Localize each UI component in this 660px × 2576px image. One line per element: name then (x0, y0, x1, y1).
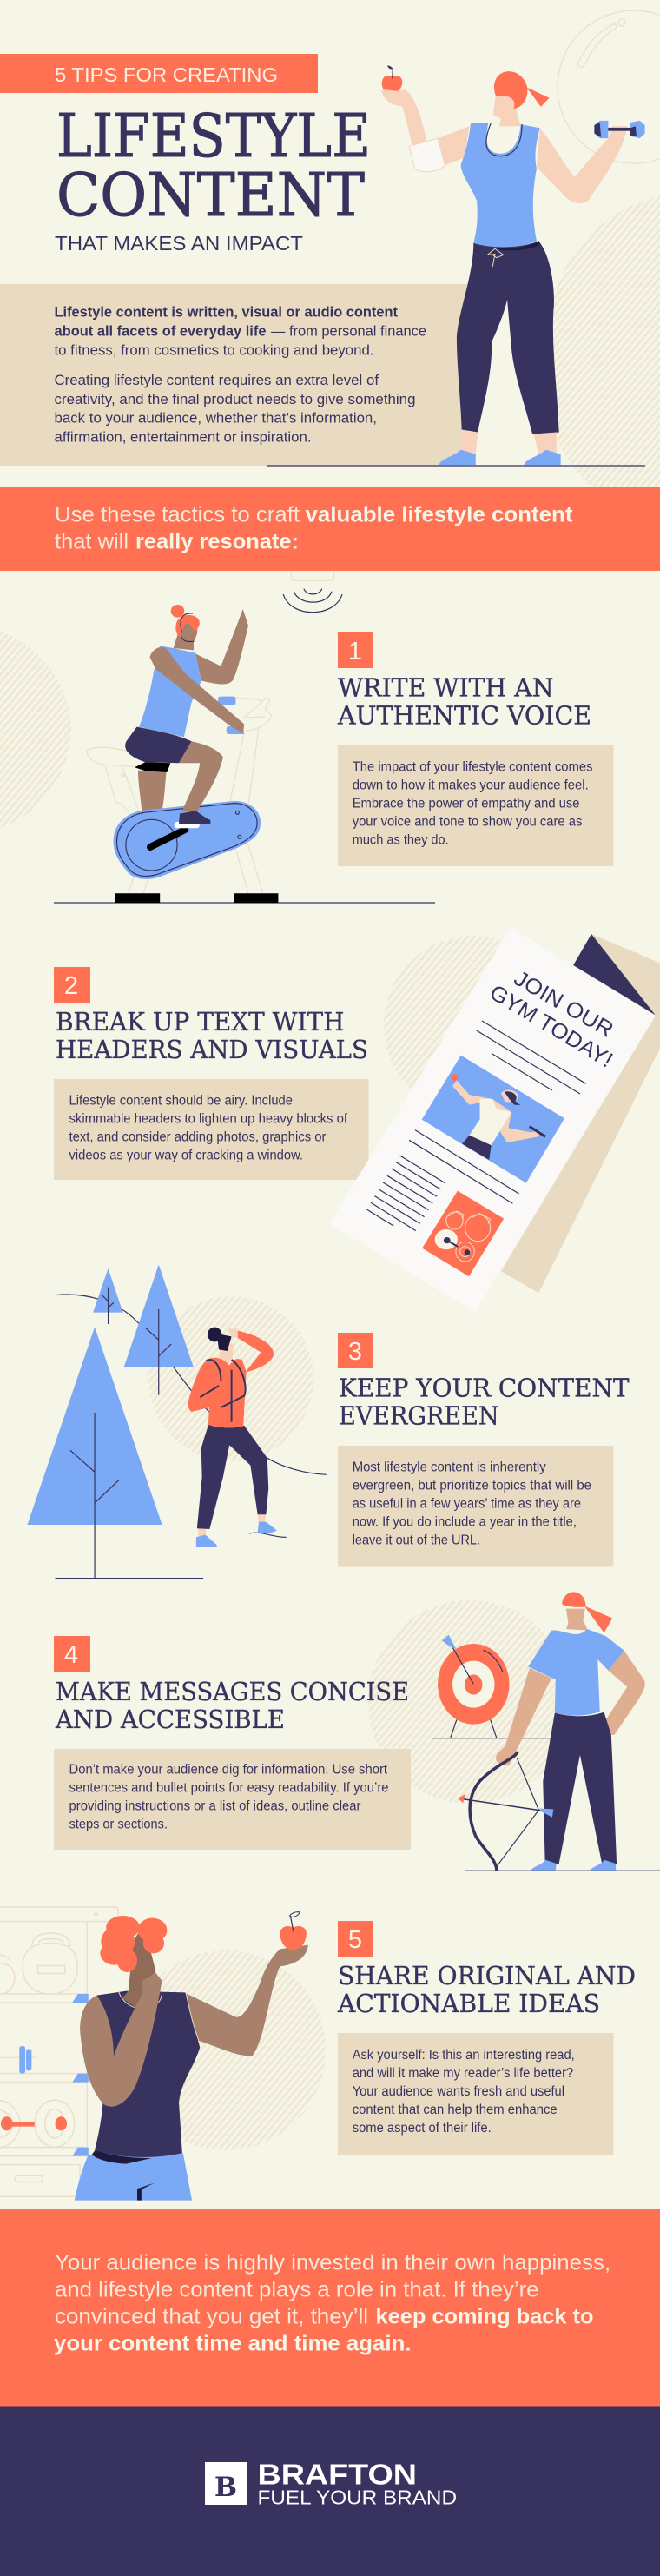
sweater (188, 1331, 274, 1427)
pants (543, 1712, 617, 1864)
raised arm (195, 609, 248, 684)
intro text: Creating lifestyle content requires an extra level of (54, 372, 379, 388)
small dumbbell (19, 2046, 31, 2074)
closing banner (0, 2209, 660, 2407)
small tree (93, 1268, 123, 1324)
illustration: thinking woman with apple (0, 1907, 308, 2201)
tactics banner: that will (55, 530, 129, 554)
tip 1 number: 1 (348, 638, 362, 666)
dumbbell disc (435, 1229, 470, 1255)
intro text: Lifestyle content is written, visual or audio content (54, 304, 398, 320)
shelf brackets (72, 1994, 89, 2156)
intro text: creativity, and the final product needs to give something (54, 391, 415, 407)
tip 3 text box: Most lifestyle content is inherently (353, 1460, 546, 1474)
tip 3 number: 3 (348, 1338, 362, 1366)
stand feet (115, 893, 278, 903)
shoe (179, 811, 210, 824)
hiker ankles and shoes (196, 1514, 287, 1547)
neck and face (174, 619, 198, 650)
ceiling speaker (283, 572, 342, 613)
tip 4 text box: providing instructions or a list of ideas, outline clear (69, 1799, 361, 1814)
neck and face (493, 93, 521, 126)
big tree (28, 1327, 162, 1579)
tip 1 heading: AUTHENTIC VOICE (337, 700, 591, 730)
striped circle: header (542, 195, 660, 487)
tip 4 heading (55, 1677, 409, 1734)
striped circle: tip 3 (148, 1296, 314, 1461)
tip 1 text box: down to how it makes your audience feel. (353, 778, 589, 792)
intro tan panel (0, 284, 467, 466)
tactics banner: Use these tactics to craft (55, 502, 300, 526)
target (432, 1635, 551, 1738)
right arm (185, 1945, 308, 2056)
brafton logo: BRAFTON (257, 2459, 417, 2490)
paper back (501, 934, 660, 1293)
tip 4 text box: sentences and bullet points for easy readability. If you’re (69, 1781, 389, 1796)
tip 3 heading: EVERGREEN (339, 1401, 498, 1430)
hair (171, 605, 200, 637)
brafton logo (205, 2459, 457, 2509)
ground line: tip 1 (54, 902, 435, 904)
pants (457, 242, 559, 434)
blue photo (422, 1056, 564, 1183)
tip 3 text box: now. If you do include a year in the title, (353, 1514, 577, 1529)
tip 5 text box (338, 2033, 613, 2155)
hair and ponytail (562, 1592, 612, 1632)
tank top (139, 646, 201, 737)
illustration: woman with apple and dumbbell (381, 66, 645, 465)
decorative bubble outline (558, 10, 660, 163)
illustration: archer and target (432, 1592, 660, 1871)
brafton logo: FUEL YOUR BRAND (257, 2487, 457, 2509)
tip 2 text box: text, and consider adding photos, graphics or (69, 1130, 327, 1145)
bow and arrow (458, 1752, 553, 1871)
closing banner: your content time and time again. (54, 2332, 412, 2356)
headset (181, 613, 194, 642)
tip 5 heading (337, 1961, 636, 2018)
ankles (462, 430, 557, 455)
tip 2 heading: HEADERS AND VISUALS (56, 1035, 368, 1064)
tip 4 number (54, 1636, 90, 1672)
backpack straps (200, 1360, 246, 1422)
tip 1 text box: Embrace the power of empathy and use (353, 796, 580, 811)
tip 5 text box: Ask yourself: Is this an interesting read, (353, 2048, 575, 2063)
tip 2 text box (54, 1079, 368, 1180)
forearm to chin (80, 1973, 162, 2107)
tip 3 number (338, 1333, 373, 1368)
title (56, 103, 371, 230)
orange photo (422, 1191, 504, 1276)
tip 5 number: 5 (348, 1926, 362, 1954)
title: LIFESTYLE (56, 103, 371, 171)
tip 1 heading: WRITE WITH AN (338, 672, 554, 702)
tip 1 number (338, 632, 373, 668)
tip 5 heading: SHARE ORIGINAL AND (338, 1961, 636, 1990)
tip 1 heading (337, 672, 591, 730)
gym shelves outline (0, 1907, 118, 2196)
tip 4 heading: MAKE MESSAGES CONCISE (56, 1677, 409, 1706)
text lines (367, 1021, 586, 1231)
tip 5 number (338, 1921, 373, 1957)
tip 2 number (54, 967, 90, 1003)
left arm (381, 89, 469, 167)
tip 1 text box: your voice and tone to show you care as (353, 814, 583, 829)
tree ground (55, 1578, 203, 1579)
shoes (439, 450, 561, 465)
closing banner: Your audience is highly invested in their own happiness, (55, 2250, 610, 2275)
trail curve (55, 1295, 327, 1474)
ground line: header (267, 465, 645, 467)
tip 3 text box (338, 1446, 613, 1567)
title: CONTENT (56, 162, 365, 230)
kettlebells (446, 1211, 491, 1262)
striped circle: tip 4 (368, 1600, 571, 1804)
blue grips (218, 697, 244, 734)
brafton logo: B (214, 2472, 237, 2503)
neck and head (220, 1328, 238, 1366)
intro text: affirmation, entertainment or inspiration. (54, 428, 311, 445)
middle tree (124, 1265, 194, 1395)
hair bun (208, 1328, 232, 1351)
back leg (138, 771, 166, 812)
tip 2 number: 2 (64, 972, 78, 1000)
shoes (531, 1860, 616, 1871)
bike frame outline (87, 698, 272, 893)
intro text (54, 304, 426, 445)
striped circle: tip 1 (0, 632, 71, 828)
apple (382, 66, 402, 94)
subtitle: THAT MAKES AN IMPACT (55, 232, 303, 255)
tip 5 text box: some aspect of their life. (353, 2121, 492, 2136)
tip 3 text box: leave it out of the URL. (353, 1533, 480, 1547)
closing banner: keep coming back to (375, 2304, 594, 2328)
head and neck (122, 1931, 155, 2009)
neck trim (486, 123, 522, 156)
tip 4 heading: AND ACCESSIBLE (55, 1705, 285, 1734)
tip 3 text box: as useful in a few years’ time as they are (353, 1496, 581, 1511)
tip 3 heading (339, 1373, 630, 1430)
newspaper headline: JOIN OUR (510, 966, 617, 1043)
intro text: back to your audience, whether that’s information, (54, 410, 377, 427)
shorts (75, 2153, 192, 2201)
neck trim (119, 1991, 199, 2040)
flywheel (114, 801, 261, 879)
eyebrow ribbon: 5 TIPS FOR CREATING (55, 63, 278, 86)
mini woman in photo (452, 1074, 545, 1160)
pants (197, 1425, 268, 1529)
waistband (495, 241, 540, 250)
illustration: gym newspaper (330, 927, 660, 1313)
knee brace (135, 762, 170, 772)
right arm (603, 1651, 645, 1735)
tip 1 text box (338, 745, 613, 866)
tip 4 number: 4 (64, 1641, 78, 1669)
tactics banner: valuable lifestyle content (306, 502, 573, 526)
left arm (496, 1668, 551, 1765)
tip 5 text box: content that can help them enhance (353, 2103, 558, 2117)
illustration: woman on exercise bike (87, 572, 342, 903)
tip 3 text box: evergreen, but prioritize topics that will be (353, 1478, 591, 1493)
wrist band (409, 138, 445, 172)
tip 2 heading: BREAK UP TEXT WITH (56, 1007, 344, 1036)
tip 2 heading (56, 1007, 368, 1064)
tip 2 text box: videos as your way of cracking a window. (69, 1149, 303, 1163)
right arm (537, 126, 627, 203)
tactics banner (0, 487, 660, 571)
tip 5 text box: Your audience wants fresh and useful (353, 2084, 564, 2099)
tip 1 text box: much as they do. (353, 832, 449, 847)
shorts (125, 727, 192, 763)
closing banner: and lifestyle content plays a role in that. If they’re (55, 2278, 538, 2302)
tip 2 text box: Lifestyle content should be airy. Include (69, 1094, 293, 1109)
hair (494, 71, 550, 109)
striped circle: tip 5 (126, 1950, 326, 2150)
apple (280, 1912, 307, 1950)
top (95, 1991, 200, 2157)
dumbbell (594, 121, 645, 138)
closing banner: convinced that you get it, they’ll (55, 2304, 368, 2328)
intro text: about all facets of everyday life (54, 323, 266, 339)
tip 4 text box: Don’t make your audience dig for information. Use short (69, 1763, 388, 1778)
tip 3 heading: KEEP YOUR CONTENT (339, 1373, 630, 1402)
tank top (461, 123, 540, 247)
drawstring (487, 248, 504, 267)
head and neck (566, 1609, 588, 1631)
newspaper headline: GYM TODAY! (485, 980, 617, 1073)
striped circle: tip 2 (384, 936, 563, 1115)
intro text: to fitness, from cosmetics to cooking and beyond. (54, 342, 373, 358)
intro text: — from personal finance (271, 323, 426, 339)
eyebrow ribbon (0, 54, 318, 93)
tip 5 heading: ACTIONABLE IDEAS (337, 1989, 600, 2018)
front leg (179, 741, 223, 812)
ground (465, 1870, 660, 1871)
belt (92, 2150, 151, 2164)
tip 5 text box: and will it make my reader’s life better? (353, 2066, 574, 2081)
footer (0, 2407, 660, 2576)
tip 4 text box: steps or sections. (69, 1818, 168, 1832)
paper sheet (330, 927, 656, 1313)
tip 4 text box (54, 1749, 411, 1850)
t-shirt (528, 1629, 624, 1716)
tip 2 text box: skimmable headers to lighten up heavy blocks of (69, 1112, 348, 1127)
illustration: hiker and trees (28, 1265, 327, 1579)
folded corner (573, 934, 656, 1015)
tip 1 text box: The impact of your lifestyle content comes (353, 759, 593, 774)
arm to handlebar (150, 647, 244, 733)
tactics banner: really resonate: (135, 530, 299, 554)
hair (100, 1916, 167, 1972)
orange dumbbell (1, 2116, 67, 2130)
